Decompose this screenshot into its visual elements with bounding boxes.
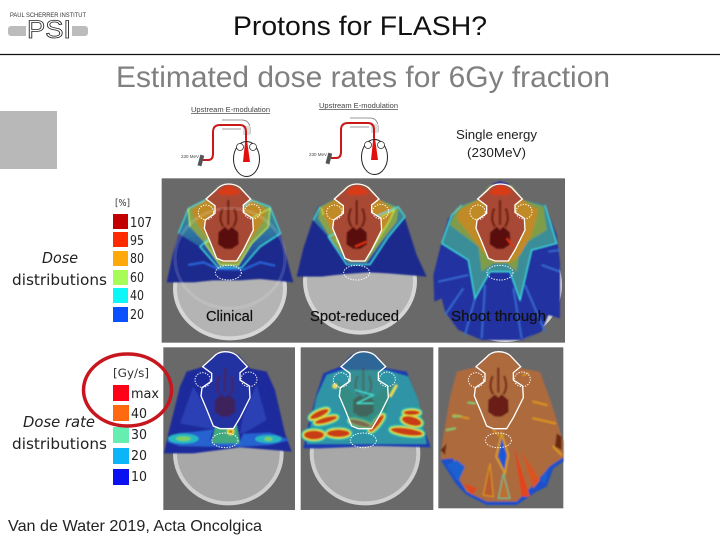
panel captions [206,309,546,325]
beam diagram: upstream E-modulation 2: Upstream E-modulation [319,103,398,110]
dose rate panel: clinical [163,347,295,510]
dose panel: clinical [167,183,293,338]
beam diagram: upstream E-modulation 1: Upstream E-modulation [191,107,270,114]
red highlight circle [84,354,172,426]
dose rate legend: 40 [131,407,147,422]
dose rate legend: max [131,387,159,402]
label: dose rate distributions: distributions [12,435,107,453]
label: dose rate distributions: Dose rate [23,413,95,431]
label: dose distributions [12,249,107,289]
PSI logo [8,13,88,44]
dose rate legend: 30 [131,428,147,443]
dose legend [113,198,152,323]
dose rate legend: 20 [131,449,147,464]
dose rate legend [113,366,159,485]
dose rate legend: 10 [131,470,147,485]
beam diagram: upstream E-modulation 1: 230 MeV [181,154,199,159]
label: dose distributions: Dose [42,249,78,267]
dose rate legend unit: [Gy/s] [113,366,149,380]
dose legend: 107 [130,216,152,231]
dose legend: 40 [130,289,144,304]
dose legend: 80 [130,252,144,267]
subtitle: Estimated dose rates for 6Gy fraction [116,61,610,94]
label: dose distributions: distributions [12,271,107,289]
caption: shoot through: Shoot through [451,309,546,325]
dose legend unit: [%] [115,198,130,209]
citation: Van de Water 2019, Acta Oncolgica [8,518,262,535]
dose distribution panels [162,178,565,343]
label: single energy [456,127,538,160]
caption: spot-reduced: Spot-reduced [310,309,399,325]
dose rate distribution panels [163,347,563,510]
beam diagram: upstream E-modulation 2: 230 MeV [309,152,327,157]
dose rate panel: shoot through [438,347,563,508]
caption: clinical: Clinical [206,309,253,325]
label: single energy: Single energy [456,127,538,142]
beam diagram: upstream E-modulation 1 [181,107,270,176]
beam diagram: upstream E-modulation 2 [309,103,398,174]
label: single energy: (230MeV) [467,145,526,160]
dose legend: 60 [130,271,144,286]
dose legend: 20 [130,308,144,323]
dose rate panel: spot-reduced [301,347,433,510]
gray placeholder square [0,111,57,169]
title: Protons for FLASH? [233,11,487,41]
label: dose rate distributions [12,413,107,453]
dose panel: shoot through [433,181,560,340]
dose legend: 95 [130,234,144,249]
logo letters: PSI [27,16,71,44]
dose panel: spot-reduced [305,229,415,333]
logo institute name: PAUL SCHERRER INSTITUT [10,13,86,19]
